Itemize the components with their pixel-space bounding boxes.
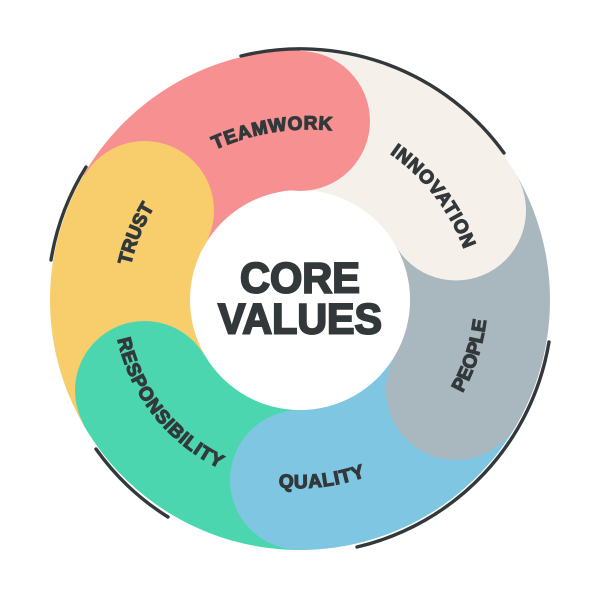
segment: responsibility <box>84 355 300 550</box>
rounded head: teamwork <box>230 51 370 191</box>
label: quality: QUALITY <box>279 464 362 492</box>
outer arc: left <box>51 167 86 260</box>
label: innovation: INNOVATION <box>390 142 476 249</box>
label: trust: TRUST <box>117 200 153 264</box>
label: people: PEOPLE <box>450 318 487 393</box>
rounded head: innovation <box>386 140 526 280</box>
segment: innovation <box>300 50 516 245</box>
center hole <box>190 191 410 410</box>
center title <box>218 256 382 344</box>
center title: CORE <box>240 256 360 302</box>
segment: quality <box>300 355 516 550</box>
rounded head: responsibility <box>75 321 214 460</box>
outer arc: top right <box>241 49 504 153</box>
rounded head: quality <box>230 410 370 550</box>
label: responsibility: RESPONSIBILITY <box>117 336 226 467</box>
center title: VALUES <box>218 296 382 344</box>
segment: trust <box>50 175 205 425</box>
rounded head: trust <box>75 141 214 280</box>
segment: teamwork <box>84 50 300 245</box>
rounded head: people <box>386 320 526 460</box>
donut ring of six value segments <box>50 50 550 550</box>
outer arc: bottom left <box>96 449 168 517</box>
outer arc: bottom right <box>357 342 549 547</box>
label: teamwork: TEAMWORK <box>209 116 334 149</box>
segment: people <box>395 175 550 425</box>
